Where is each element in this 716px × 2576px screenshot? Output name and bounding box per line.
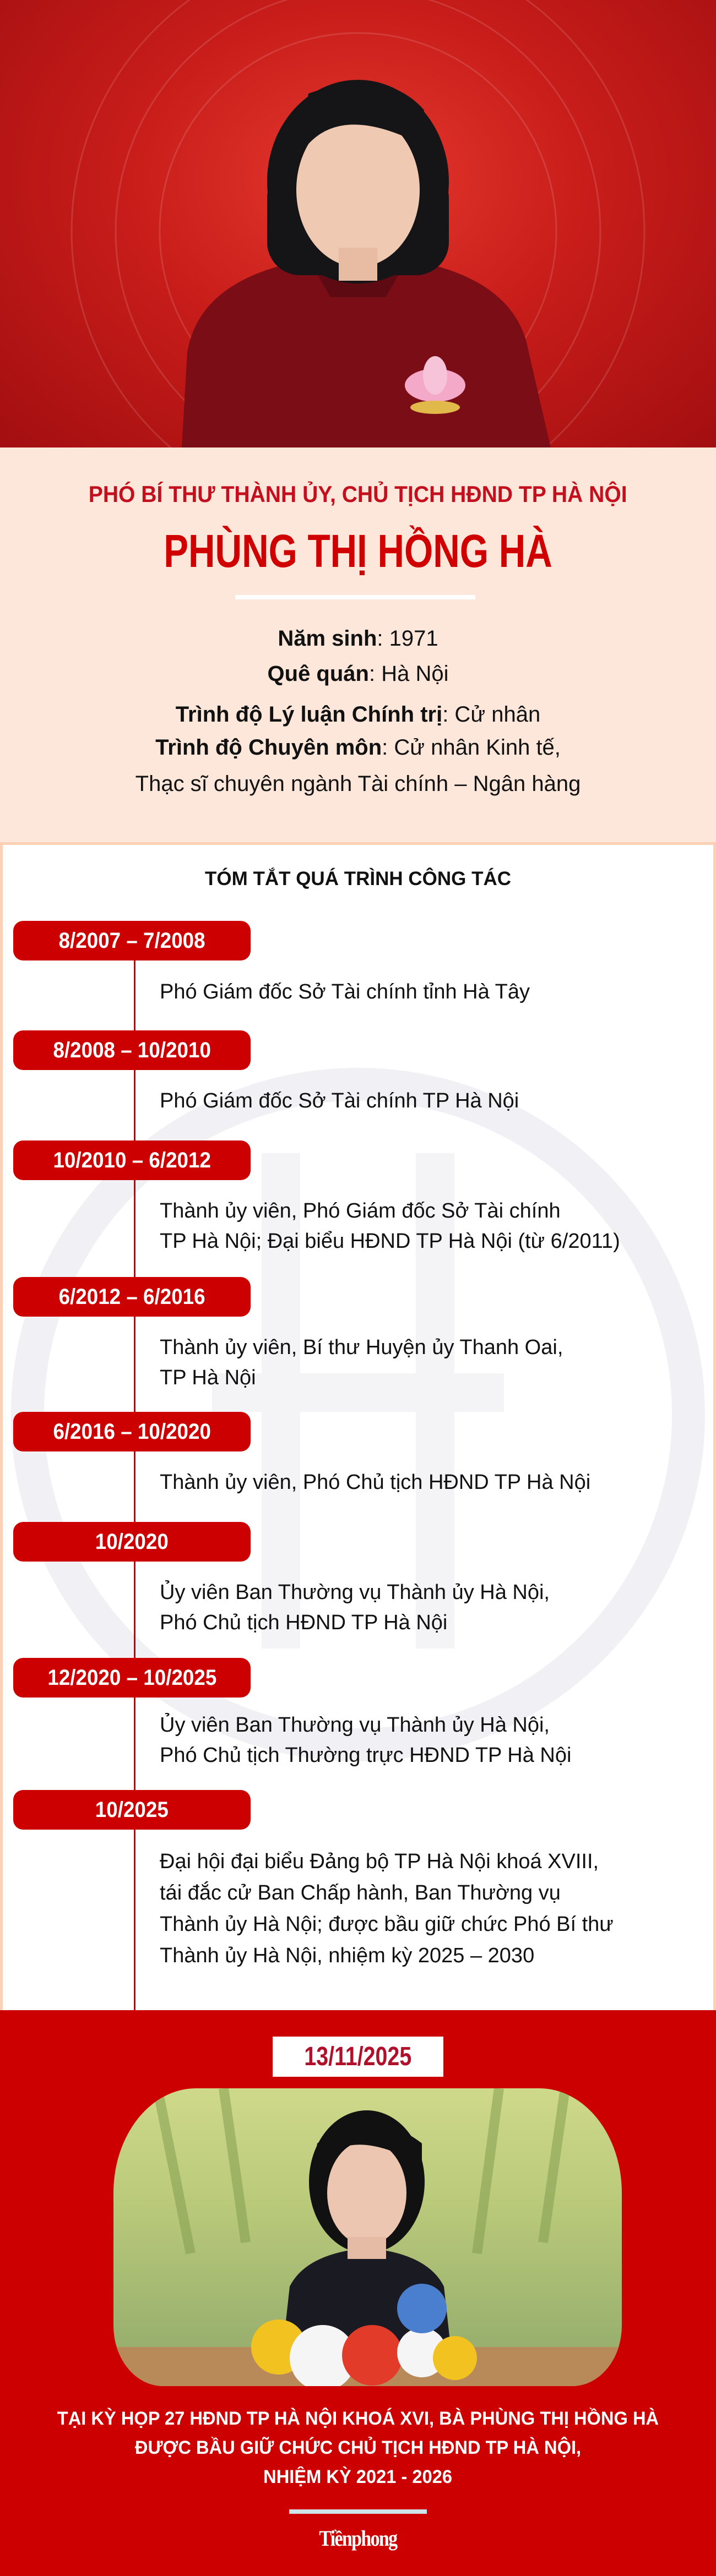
subtitle: PHÓ BÍ THƯ THÀNH ỦY, CHỦ TỊCH HĐND TP HÀ NỘI bbox=[89, 481, 627, 507]
timeline item 8: Đại hội đại biểu Đảng bộ TP Hà Nội khoá XVIII, bbox=[160, 1850, 599, 1873]
timeline item 5: Thành ủy viên, Phó Chủ tịch HĐND TP Hà Nội bbox=[160, 1471, 590, 1494]
name: PHÙNG THỊ HỒNG HÀ bbox=[164, 525, 552, 577]
timeline item 8: tái đắc cử Ban Chấp hành, Ban Thường vụ bbox=[160, 1881, 561, 1904]
beige info panel: Quê quán: Hà Nội bbox=[268, 662, 448, 686]
timeline item 4: 6/2012 – 6/2016 bbox=[58, 1285, 205, 1309]
timeline item 8: Thành ủy Hà Nội; được bầu giữ chức Phó Bí thư bbox=[160, 1913, 614, 1936]
timeline item 1: Phó Giám đốc Sở Tài chính tỉnh Hà Tây bbox=[160, 980, 530, 1003]
timeline item 3: Thành ủy viên, Phó Giám đốc Sở Tài chính bbox=[160, 1199, 561, 1222]
date badge bbox=[273, 2037, 443, 2077]
divider bbox=[235, 595, 475, 599]
timeline item 6: Ủy viên Ban Thường vụ Thành ủy Hà Nội, bbox=[160, 1581, 550, 1604]
beige info panel bbox=[0, 447, 716, 845]
timeline item 1: 8/2007 – 7/2008 bbox=[58, 929, 205, 953]
flowers bbox=[113, 2284, 622, 2391]
timeline item 2 bbox=[13, 1030, 519, 1112]
timeline item 8 bbox=[13, 1790, 614, 1967]
timeline item 3: TP Hà Nội; Đại biểu HĐND TP Hà Nội (từ 6/2011) bbox=[160, 1230, 620, 1253]
beige info panel: Trình độ Chuyên môn: Cử nhân Kinh tế, bbox=[155, 735, 561, 760]
timeline item 2: 8/2008 – 10/2010 bbox=[53, 1038, 211, 1062]
timeline item 4: Thành ủy viên, Bí thư Huyện ủy Thanh Oai, bbox=[160, 1336, 563, 1359]
timeline item 8: Thành ủy Hà Nội, nhiệm kỳ 2025 – 2030 bbox=[160, 1944, 534, 1967]
bottom caption: TẠI KỲ HỌP 27 HĐND TP HÀ NỘI KHOÁ XVI, BÀ PHÙNG THỊ HỒNG HÀ bbox=[57, 2408, 659, 2429]
timeline item 5 bbox=[13, 1412, 590, 1494]
timeline item 1 bbox=[13, 921, 530, 1003]
timeline item 3 bbox=[13, 1140, 620, 1253]
timeline item 6 bbox=[13, 1522, 550, 1634]
beige info panel: Trình độ Lý luận Chính trị: Cử nhân bbox=[176, 702, 540, 727]
bottom divider bbox=[289, 2509, 427, 2514]
timeline item 7: 12/2020 – 10/2025 bbox=[47, 1666, 216, 1690]
speaker figure bbox=[279, 2110, 455, 2386]
timeline item 6: Phó Chủ tịch HĐND TP Hà Nội bbox=[160, 1611, 447, 1634]
bottom caption: ĐƯỢC BẦU GIỮ CHỨC CHỦ TỊCH HĐND TP HÀ NỘI, bbox=[135, 2437, 581, 2458]
timeline heading: TÓM TẮT QUÁ TRÌNH CÔNG TÁC bbox=[205, 868, 511, 889]
timeline item 6: 10/2020 bbox=[95, 1530, 169, 1554]
timeline item 8: 10/2025 bbox=[95, 1798, 169, 1822]
portrait figure bbox=[182, 80, 551, 447]
logo: Tiền phong: Tiềnphong bbox=[319, 2526, 397, 2551]
timeline item 7 bbox=[13, 1658, 571, 1767]
beige info panel: Thạc sĩ chuyên ngành Tài chính – Ngân hàng bbox=[135, 772, 581, 796]
bottom caption bbox=[57, 2408, 659, 2487]
timeline item 7: Phó Chủ tịch Thường trực HĐND TP Hà Nội bbox=[160, 1744, 571, 1767]
personal info: Năm sinh: 1971 bbox=[278, 626, 438, 651]
bottom photo bbox=[113, 2088, 622, 2386]
timeline item 3: 10/2010 – 6/2012 bbox=[53, 1148, 211, 1172]
timeline item 4: TP Hà Nội bbox=[160, 1366, 256, 1389]
timeline item 2: Phó Giám đốc Sở Tài chính TP Hà Nội bbox=[160, 1089, 519, 1112]
timeline item 7: Ủy viên Ban Thường vụ Thành ủy Hà Nội, bbox=[160, 1713, 550, 1737]
timeline vertical line bbox=[134, 960, 135, 2010]
timeline item 5: 6/2016 – 10/2020 bbox=[53, 1420, 211, 1444]
timeline panel bbox=[0, 842, 716, 2010]
header photo bbox=[0, 0, 716, 447]
timeline item 4 bbox=[13, 1277, 563, 1389]
date badge: 13/11/2025 bbox=[305, 2042, 411, 2071]
bottom caption: NHIỆM KỲ 2021 - 2026 bbox=[264, 2466, 452, 2487]
